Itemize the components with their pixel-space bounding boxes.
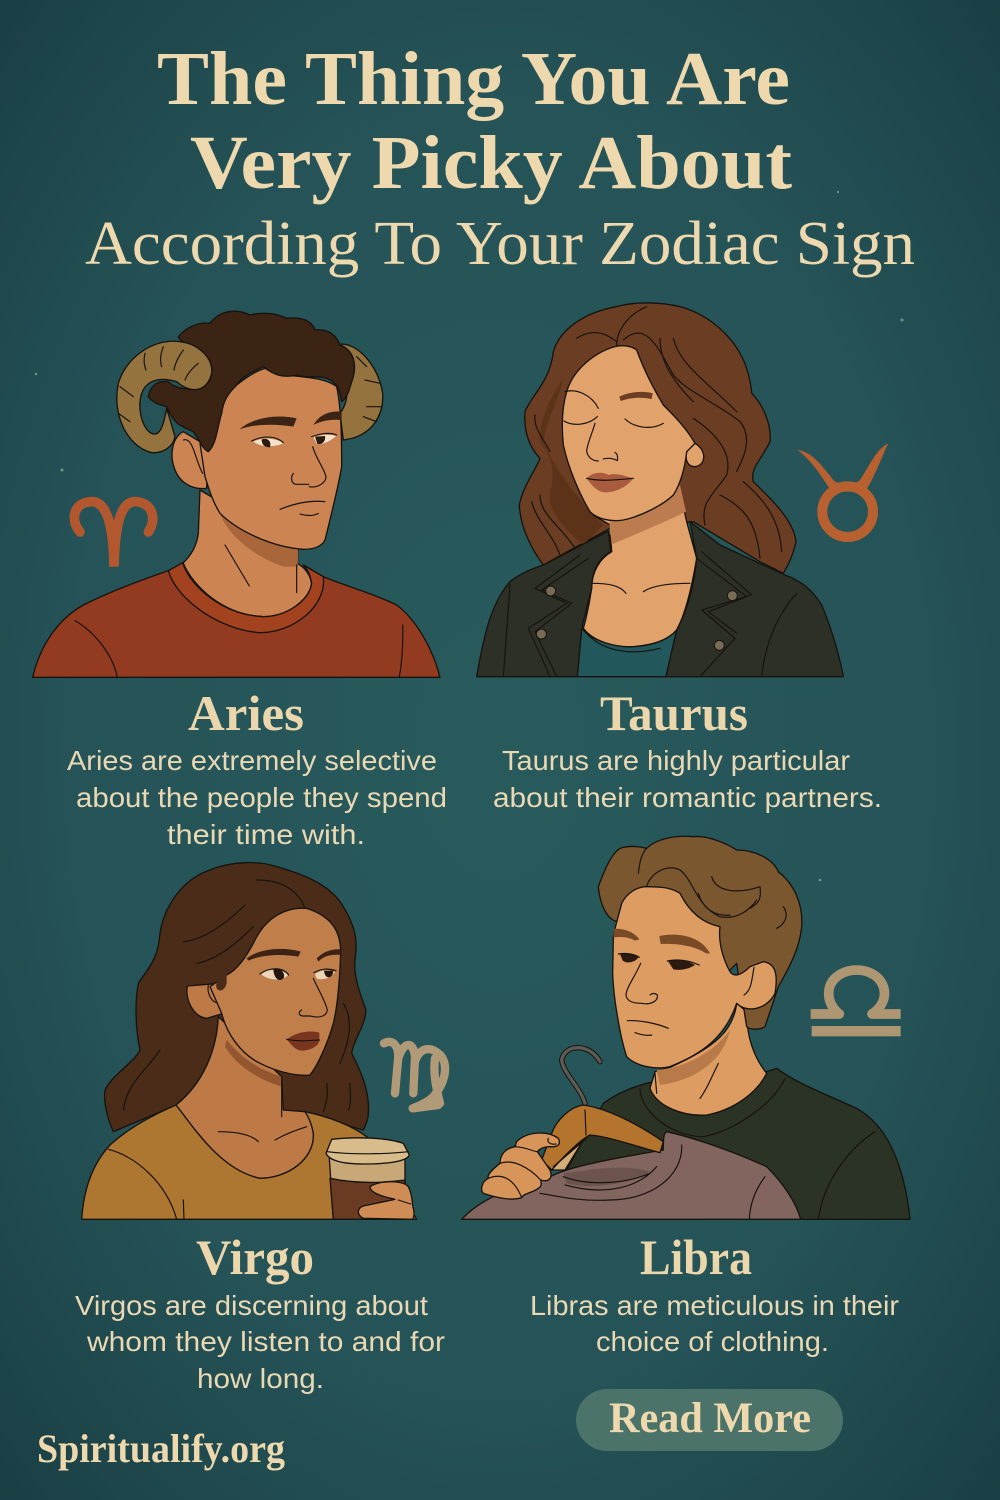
face xyxy=(613,887,776,1068)
icon: Taurus symbol xyxy=(797,443,888,537)
text: Aries description: about the people they spend xyxy=(76,782,447,813)
text: Aries description xyxy=(67,745,447,850)
shirt on hanger xyxy=(462,1132,801,1219)
text: Libra description: Libras are meticulous in their xyxy=(530,1290,899,1321)
hand xyxy=(358,1182,414,1219)
icon: Libra symbol xyxy=(811,970,901,1036)
text: Libra description: choice of clothing. xyxy=(596,1326,829,1357)
text: Aries description: Aries are extremely selective xyxy=(67,745,437,776)
ear xyxy=(172,432,208,489)
text: Virgo description: how long. xyxy=(197,1363,324,1394)
text: Libra description xyxy=(530,1290,899,1357)
text: Aries description: their time with. xyxy=(167,819,365,850)
hair xyxy=(105,863,369,1132)
heading: Taurus: Taurus xyxy=(600,685,748,741)
eyes and brows xyxy=(239,411,342,429)
facial features xyxy=(247,949,341,962)
hair xyxy=(148,311,355,452)
shirt xyxy=(33,563,440,677)
face xyxy=(210,908,341,1075)
face xyxy=(562,346,695,521)
panel: Libra portrait xyxy=(462,836,910,1219)
text: Virgo description: whom they listen to and for xyxy=(86,1326,445,1357)
heading: Libra: Libra xyxy=(640,1229,752,1285)
title: Very Picky About xyxy=(190,121,792,205)
panel: Aries portrait xyxy=(33,311,440,677)
hair xyxy=(598,836,802,1029)
ear xyxy=(686,443,704,467)
heading: Virgo: Virgo xyxy=(196,1229,314,1285)
title xyxy=(85,37,915,278)
icon: Aries symbol xyxy=(74,502,153,567)
sweater xyxy=(567,1068,910,1219)
button: Read More xyxy=(576,1389,843,1451)
face xyxy=(200,368,342,549)
heading: Aries: Aries xyxy=(188,685,304,741)
coffee cup xyxy=(329,1158,405,1219)
ear xyxy=(187,983,223,1018)
top xyxy=(82,1105,417,1219)
panel: Taurus portrait xyxy=(477,303,843,677)
left horn xyxy=(117,341,212,453)
icon: Virgo symbol xyxy=(384,1042,445,1108)
facial features xyxy=(613,929,710,953)
text: Taurus description xyxy=(493,745,882,813)
neck xyxy=(183,490,312,617)
jacket xyxy=(477,531,611,677)
text: Taurus description: Taurus are highly particular xyxy=(502,745,850,776)
text: Virgo description: Virgos are discerning about xyxy=(75,1290,428,1321)
button: Read More: Read More xyxy=(609,1395,811,1442)
facial features xyxy=(619,392,653,401)
right horn xyxy=(340,344,383,440)
title: The Thing You Are xyxy=(157,37,790,121)
hair xyxy=(519,303,796,573)
hanger wood xyxy=(550,1140,583,1170)
hand xyxy=(482,1133,559,1199)
neck and chest xyxy=(176,1017,313,1178)
panel: Virgo portrait xyxy=(82,863,417,1219)
title: According To Your Zodiac Sign xyxy=(85,210,915,278)
neck and chest xyxy=(583,492,697,647)
text: Taurus description: about their romantic partners. xyxy=(493,782,882,813)
brand: Spiritualify.org: Spiritualify.org xyxy=(37,1426,285,1471)
hanger hook xyxy=(562,1048,600,1103)
neck xyxy=(650,1003,767,1115)
jacket snaps xyxy=(536,586,737,650)
teal top xyxy=(577,628,677,677)
nose and mouth xyxy=(225,447,326,593)
text: Virgo description xyxy=(75,1290,445,1394)
